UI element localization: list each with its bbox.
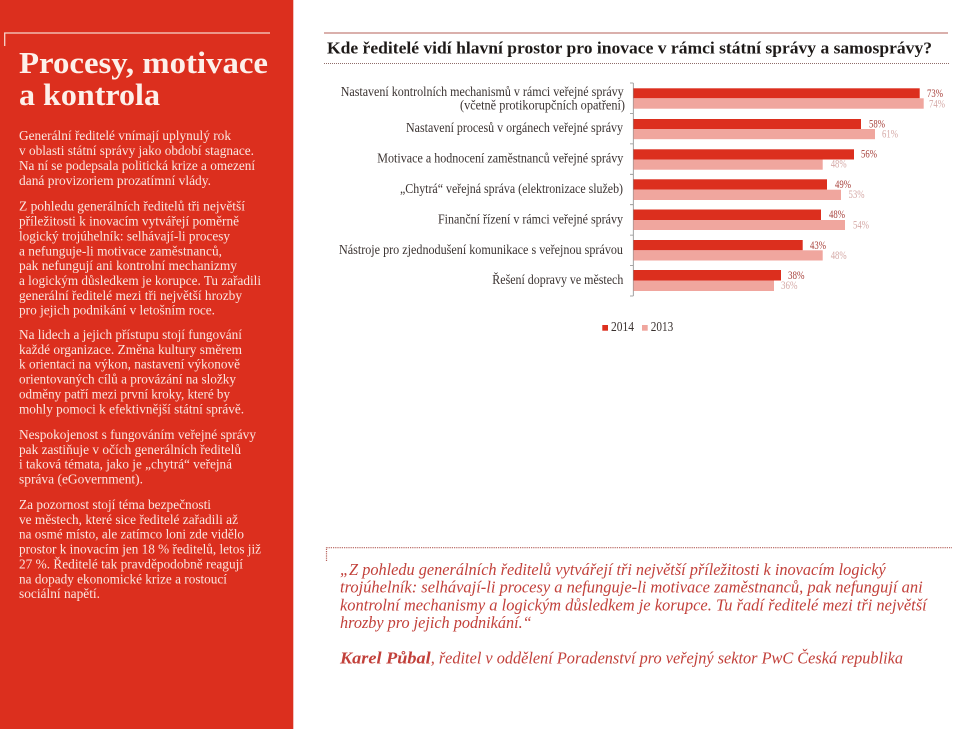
bars: city transport: 38% <box>788 270 805 282</box>
text block: people and culture: každé organizace. Změna kultury směrem <box>19 343 242 358</box>
category labels: (včetně protikorupčních opatření) <box>460 98 625 112</box>
quote attribution: , ředitel v oddělení Poradenství pro veřejný sektor PwC Česká republika <box>431 648 903 667</box>
text block: people and culture: mohly pomoci k efektivnější státní správě. <box>19 402 244 417</box>
bars: smart administration: 49% <box>835 179 851 191</box>
bars: smart administration: 53% <box>848 189 865 201</box>
quote text: kontrolní mechanismy a logickým důsledkem je korupce. Tu řadí ředitelé mezi tři největší <box>340 596 928 615</box>
category labels: Nastavení kontrolních mechanismů v rámci veřejné správy <box>341 84 624 99</box>
bars: control mechanisms: 73% <box>927 88 943 100</box>
bars: financial management <box>634 209 869 232</box>
text block: opportunities triangle: pro jejich podnikání v letošním roce. <box>19 304 215 319</box>
callout: quote <box>326 548 952 667</box>
text block: opportunities triangle: a logickým důsledkem je korupce. Tu zařadili <box>19 274 261 289</box>
bars: motivation: 48% <box>831 158 847 170</box>
text block: dissatisfaction: i taková témata, jako je „chytrá“ veřejná <box>19 458 233 473</box>
bar chart: innovation areas 2014 vs 2013 <box>339 83 945 334</box>
text block: city safety: sociální napětí. <box>19 587 100 602</box>
bars: processes: 61% <box>882 128 898 140</box>
bars: communication tools: 43% <box>810 240 826 252</box>
bars: control mechanisms: 74% <box>929 99 945 111</box>
bars: communication tools: 48% <box>831 250 847 262</box>
text block: city safety: Za pozornost stojí téma bezpečnosti <box>19 498 211 513</box>
bars: city transport <box>634 270 805 292</box>
text block: city safety: 27 %. Ředitelé tak pravděpodobně reagují <box>19 556 243 572</box>
text block: dissatisfaction: pak zastiňuje v očích generálních ředitelů <box>19 443 241 458</box>
text block: city safety: na dopady ekonomické krize a rostoucí <box>19 572 227 587</box>
text block: intro: Generální ředitelé vnímají uplynulý rok <box>19 129 231 144</box>
bars: processes <box>634 118 898 140</box>
quote text <box>340 560 928 632</box>
text block: opportunities triangle: logický trojúhelník: selhávají-li procesy <box>19 229 230 244</box>
text block: people and culture: k orientaci na výkon, nastavení výkonově <box>19 358 240 373</box>
legend: 2014 <box>611 319 634 334</box>
legend <box>602 319 673 334</box>
quote text: hrozby pro jejich podnikání.“ <box>340 613 532 632</box>
bars: communication tools <box>634 240 847 262</box>
text block: people and culture: Na lidech a jejich přístupu stojí fungování <box>19 328 242 343</box>
bars: processes: 58% <box>869 118 885 130</box>
text block: intro: v oblasti státní správy jako období stagnace. <box>19 144 254 159</box>
text block: city safety: ve městech, které sice ředitelé zařadili až <box>19 513 238 528</box>
category labels: Řešení dopravy ve městech <box>492 272 624 287</box>
text block: people and culture: odměny patří mezi první kroky, které by <box>19 387 230 402</box>
text block: city safety: prostor k inovacím jen 18 % ředitelů, letos již <box>19 543 261 558</box>
text block: opportunities triangle: pak nefungují ani kontrolní mechanizmy <box>19 259 237 274</box>
text block: dissatisfaction: Nespokojenost s fungováním veřejné správy <box>19 428 256 443</box>
category labels <box>339 84 625 287</box>
bars: city transport: 36% <box>781 280 798 292</box>
category labels: Finanční řízení v rámci veřejné správy <box>438 211 623 226</box>
text block: dissatisfaction <box>19 428 256 488</box>
text block: dissatisfaction: správa (eGovernment). <box>19 473 143 488</box>
category labels: Motivace a hodnocení zaměstnanců veřejné správy <box>377 151 624 166</box>
bars: control mechanisms <box>634 88 945 111</box>
text block: opportunities triangle: příležitosti k inovacím vytvářejí poměrně <box>19 214 239 230</box>
text block: opportunities triangle: Z pohledu generálních ředitelů tři největší <box>19 200 245 215</box>
legend: 2013 <box>651 319 673 334</box>
bars: motivation <box>634 148 877 170</box>
text block: opportunities triangle: a nefunguje-li motivace zaměstnanců, <box>19 244 222 259</box>
text block: city safety: na osmé místo, ale zatímco loni zde vidělo <box>19 528 244 543</box>
text block: people and culture: orientovaných cílů a provázání na složky <box>19 373 236 388</box>
heading: chart question: Kde ředitelé vidí hlavní prostor pro inovace v rámci státní správy a samosprávy? <box>327 38 932 58</box>
text block: opportunities triangle <box>19 200 261 319</box>
category labels: Nastavení procesů v orgánech veřejné správy <box>406 120 623 135</box>
bars: financial management: 48% <box>829 209 845 221</box>
title: Procesy, motivace <box>19 45 268 80</box>
axis <box>630 83 633 296</box>
category labels: „Chytrá“ veřejná správa (elektronizace služeb) <box>400 181 623 196</box>
text block: intro: daná provizoriem prozatímní vlády. <box>19 174 211 189</box>
text block: opportunities triangle: generální ředitelé mezi tři největší hrozby <box>19 289 242 304</box>
title: a kontrola <box>19 77 161 112</box>
quote attribution: Karel Půbal <box>339 648 431 667</box>
text block: intro: Na ní se podepsala politická krize a omezení <box>19 159 255 174</box>
quote text: trojúhelník: selhávají-li procesy a nefunguje-li motivace zaměstnanců, pak nefungují ani <box>340 578 923 597</box>
category labels: Nástroje pro zjednodušení komunikace s veřejnou správou <box>339 242 623 257</box>
text block: city safety <box>19 498 261 602</box>
bars: motivation: 56% <box>861 148 877 160</box>
bars: smart administration <box>634 179 865 201</box>
quote text: „Z pohledu generálních ředitelů vytvářejí tři největší příležitosti k inovacím logický <box>340 560 886 579</box>
title <box>19 45 268 112</box>
text block: people and culture <box>19 328 244 417</box>
bars: financial management: 54% <box>853 220 869 232</box>
text block: intro <box>19 129 255 189</box>
panel: left red sidebar <box>0 0 293 729</box>
